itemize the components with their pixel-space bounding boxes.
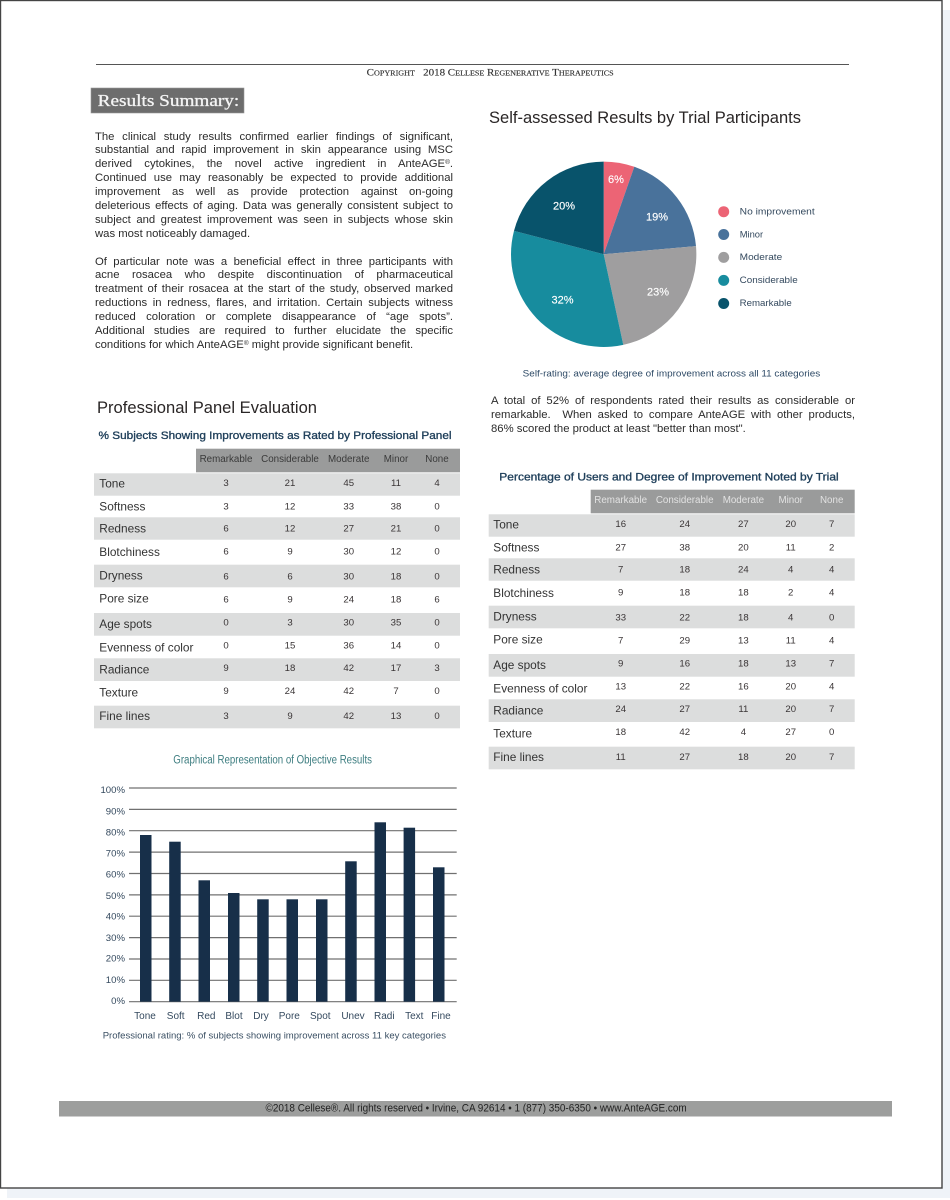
bar chart: Soft: [167, 1011, 185, 1022]
table: users by trial: 16: [615, 519, 626, 530]
table: users by trial: 4: [829, 636, 835, 647]
text block: results paragraph two: reductions in redness, flares, and irritation. Certain subjects witness: [95, 297, 453, 309]
bar chart: Pore: [279, 1011, 300, 1022]
table: professional panel: Blotchiness: [99, 545, 160, 559]
pie legend: Moderate: [740, 251, 782, 262]
table: professional panel: 18: [391, 595, 401, 606]
text block: results paragraph two: Additional studies are required to further elucidate the specific: [95, 325, 453, 337]
table: professional panel: 30: [343, 617, 354, 628]
bar chart: 20%: [106, 954, 125, 965]
table: users by trial: 11: [738, 704, 748, 715]
table: users by trial: Remarkable: [594, 495, 648, 506]
table: users by trial: 16: [679, 658, 690, 669]
table: professional panel: 17: [391, 663, 401, 674]
text block: results paragraph two: treatment of their rosacea at the start of the study, observed marked: [95, 283, 453, 295]
table: professional panel: 6: [223, 571, 229, 582]
table: users by trial: 18: [679, 588, 690, 599]
heading: professional panel: Professional Panel Evaluation: [97, 399, 317, 417]
table: professional panel: 3: [223, 478, 229, 489]
pie legend: [718, 206, 815, 309]
table: professional panel: 42: [343, 711, 354, 722]
table: users by trial: 11: [786, 636, 796, 647]
table: users by trial: 20: [785, 704, 796, 715]
table: users by trial: 27: [738, 519, 749, 530]
heading: self-assessed results: Self-assessed Results by Trial Participants: [489, 109, 801, 127]
table: professional panel: 14: [391, 640, 402, 651]
table: users by trial: 18: [615, 727, 626, 738]
table: professional panel: 3: [223, 711, 229, 722]
heading: results summary: [91, 88, 244, 113]
table: users by trial: 18: [738, 658, 749, 669]
table: users by trial: 7: [829, 752, 834, 763]
table: users by trial: Texture: [493, 727, 533, 741]
table: users by trial: 16: [738, 681, 749, 692]
table: users by trial: 2: [829, 542, 834, 553]
table: professional panel: 36: [343, 640, 354, 651]
pie caption: Self-rating: average degree of improvement across all 11 categories: [523, 368, 821, 379]
text block: results paragraph one: [95, 131, 453, 240]
bar chart: 100%: [100, 785, 125, 796]
table: users by trial: Fine lines: [493, 750, 544, 764]
table: professional panel: Considerable: [261, 454, 319, 465]
table: professional panel: 0: [434, 686, 440, 697]
table: users by trial: 24: [679, 519, 691, 530]
text block: self-assessed summary: [491, 395, 855, 435]
table: professional panel: 3: [434, 663, 440, 674]
table: users by trial: 18: [738, 752, 749, 763]
pie chart: 6%: [608, 174, 624, 186]
table: professional panel: 38: [391, 501, 401, 512]
table: users by trial: 33: [615, 612, 626, 623]
table: professional panel: 0: [434, 547, 440, 558]
table: professional panel: 4: [434, 478, 440, 489]
table: users by trial: 27: [679, 752, 690, 763]
table: users by trial: Softness: [493, 541, 539, 555]
table: professional panel: 0: [434, 617, 440, 628]
text block: self-assessed summary: A total of 52% of respondents rated their results as considerable or: [491, 395, 855, 407]
table: users by trial: Redness: [493, 563, 540, 577]
table: professional panel: Fine lines: [99, 709, 150, 723]
text block: self-assessed summary: 86% scored the product at least "better than most".: [491, 423, 746, 435]
bar chart: Red: [197, 1011, 215, 1022]
text block: results paragraph two: [95, 256, 453, 351]
table: professional panel: 12: [391, 547, 401, 558]
table: users by trial: 4: [829, 681, 835, 692]
table: users by trial: 22: [679, 681, 690, 692]
table: users by trial: 29: [679, 636, 690, 647]
table: users by trial: 20: [785, 752, 796, 763]
bar chart: 40%: [106, 912, 125, 923]
text block: results paragraph one: was most noticeably damaged.: [95, 228, 250, 240]
table: professional panel: 18: [391, 571, 401, 582]
table: professional panel: 0: [434, 640, 440, 651]
bar chart: 10%: [106, 975, 125, 986]
table: users by trial: 20: [785, 519, 796, 530]
table: professional panel: 0: [223, 617, 229, 628]
table: professional panel: [94, 449, 460, 728]
table: users by trial: Dryness: [493, 609, 537, 623]
table: professional panel: 13: [391, 711, 401, 722]
table: professional panel: 15: [285, 640, 295, 651]
table: professional panel: Texture: [99, 686, 139, 700]
table: professional panel: 30: [343, 547, 354, 558]
table: professional panel: 9: [287, 547, 293, 558]
table: users by trial: Pore size: [493, 633, 543, 647]
table: users by trial: Age spots: [493, 658, 546, 672]
table: professional panel: 6: [434, 595, 440, 606]
table: users by trial: 20: [785, 681, 796, 692]
table: users by trial: 2: [788, 588, 793, 599]
table: users by trial: 11: [616, 752, 626, 763]
table: users by trial: 27: [785, 727, 796, 738]
table: professional panel: 9: [223, 686, 229, 697]
table: users by trial: 42: [679, 727, 690, 738]
table: users by trial: 9: [618, 588, 623, 599]
table: users by trial: Moderate: [723, 495, 765, 506]
table: professional panel: Tone: [99, 476, 125, 490]
subtitle: user trial table: Percentage of Users and Degree of Improvement Noted by Trial: [499, 472, 839, 484]
table: professional panel: 7: [393, 686, 399, 697]
table: professional panel: None: [425, 454, 449, 465]
pie chart: 32%: [551, 294, 574, 306]
table: professional panel: 9: [287, 595, 293, 606]
table: users by trial: 13: [785, 658, 796, 669]
table: professional panel: 45: [343, 478, 354, 489]
table: professional panel: 12: [285, 524, 295, 535]
table: users by trial: 13: [615, 681, 626, 692]
table: professional panel: 33: [343, 501, 354, 512]
table: users by trial: 4: [829, 565, 835, 576]
bar chart: 80%: [106, 828, 125, 839]
copyright line: Copyright 2018 Cellese Regenerative Therapeutics: [367, 69, 614, 79]
bar chart: 90%: [106, 806, 125, 817]
table: users by trial: 11: [786, 542, 796, 553]
text block: results paragraph one: derived cytokines, the novel active ingredient in AnteAGE®.: [95, 158, 453, 170]
bar chart: 60%: [106, 870, 125, 881]
bar chart: [100, 785, 457, 1022]
table: users by trial: 4: [788, 612, 794, 623]
table: users by trial: 18: [738, 612, 749, 623]
table: professional panel: Remarkable: [200, 454, 253, 465]
table: professional panel: 0: [434, 711, 440, 722]
bar chart: 0%: [111, 996, 125, 1007]
table: users by trial: 0: [829, 612, 834, 623]
table: professional panel: 24: [343, 595, 355, 606]
pie legend: Minor: [740, 228, 763, 239]
table: professional panel: 3: [223, 501, 229, 512]
pie legend: Considerable: [740, 274, 798, 285]
table: professional panel: Radiance: [99, 662, 150, 676]
heading: bar chart title: Graphical Representation of Objective Results: [173, 755, 372, 767]
pie chart: 19%: [646, 212, 668, 224]
table: users by trial: 13: [738, 636, 749, 647]
table: professional panel: 6: [223, 524, 229, 535]
bar chart: 30%: [106, 933, 125, 944]
text block: results paragraph one: The clinical study results confirmed earlier findings of significant,: [95, 131, 453, 143]
table: users by trial: 4: [829, 588, 835, 599]
table: users by trial: 18: [679, 565, 690, 576]
table: professional panel: 0: [434, 524, 440, 535]
bar chart: Text: [405, 1011, 424, 1022]
text block: results paragraph one: substantial and rapid improvement in skin appearance using MSC: [95, 144, 453, 156]
table: users by trial: 7: [618, 565, 623, 576]
table: professional panel: 0: [223, 640, 229, 651]
table: users by trial: 38: [679, 542, 690, 553]
footer bar: [59, 1101, 892, 1116]
bar chart: Dry: [253, 1011, 269, 1022]
pie chart: [511, 162, 696, 347]
table: professional panel: Pore size: [99, 592, 149, 606]
bar chart: Spot: [310, 1011, 331, 1022]
table: professional panel: 18: [285, 663, 295, 674]
table: professional panel: Moderate: [328, 454, 370, 465]
table: users by trial: 24: [615, 704, 627, 715]
table: users by trial: None: [820, 495, 844, 506]
table: professional panel: 21: [391, 524, 401, 535]
table: professional panel: 6: [287, 571, 293, 582]
table: professional panel: Evenness of color: [99, 641, 193, 655]
table: professional panel: Age spots: [99, 617, 152, 631]
table: users by trial: Minor: [778, 495, 804, 506]
text block: results paragraph two: acne rosacea who despite discontinuation of pharmaceutical: [95, 269, 453, 281]
table: users by trial: Tone: [493, 517, 519, 531]
table: professional panel: 27: [343, 524, 354, 535]
table: users by trial: [489, 490, 855, 769]
table: users by trial: 4: [788, 565, 794, 576]
table: professional panel: 42: [343, 686, 354, 697]
text block: results paragraph one: subject and greatest improvement was seen in subjects whose skin: [95, 214, 453, 226]
table: users by trial: 27: [615, 542, 626, 553]
bar chart: 50%: [106, 891, 125, 902]
table: users by trial: 4: [741, 727, 747, 738]
pie legend: Remarkable: [740, 297, 792, 308]
text block: results paragraph one: Continued use may reasonably be expected to provide additional: [95, 172, 453, 184]
text block: results paragraph two: reduced coloration or complete disappearance of “age spots”.: [95, 311, 453, 323]
bar chart: Blot: [225, 1011, 243, 1022]
table: professional panel: Redness: [99, 522, 146, 536]
table: professional panel: 9: [287, 711, 293, 722]
text block: self-assessed summary: remarkable. When asked to compare AnteAGE with other products,: [491, 409, 855, 421]
table: professional panel: 6: [223, 595, 229, 606]
table: users by trial: 7: [829, 658, 834, 669]
table: users by trial: 24: [738, 565, 749, 576]
bar chart: 70%: [106, 849, 125, 860]
bar chart: Fine: [431, 1011, 451, 1022]
table: users by trial: 27: [679, 704, 690, 715]
bar chart: Tone: [134, 1011, 156, 1022]
table: users by trial: 9: [618, 658, 623, 669]
bar chart: Radi: [374, 1011, 395, 1022]
table: professional panel: 3: [287, 617, 293, 628]
table: professional panel: 30: [343, 571, 354, 582]
table: professional panel: Softness: [99, 500, 145, 514]
table: users by trial: 20: [738, 542, 749, 553]
text block: results paragraph two: conditions for which AnteAGE® might provide significant benefit.: [95, 339, 413, 351]
table: professional panel: 0: [434, 501, 440, 512]
table: professional panel: Minor: [384, 454, 409, 465]
pie legend: No improvement: [740, 206, 815, 216]
table: users by trial: Radiance: [493, 703, 544, 717]
table: professional panel: 42: [343, 663, 354, 674]
bar chart caption: Professional rating: % of subjects showing improvement across 11 key categories: [103, 1030, 446, 1041]
table: users by trial: Considerable: [656, 495, 714, 506]
bar chart: Unev: [341, 1011, 365, 1022]
table: users by trial: 22: [679, 612, 690, 623]
table: professional panel: 11: [391, 478, 401, 489]
table: professional panel: 35: [391, 617, 401, 628]
table: professional panel: 0: [434, 571, 440, 582]
table: users by trial: 7: [829, 704, 834, 715]
table: users by trial: Evenness of color: [493, 682, 587, 696]
pie chart: 20%: [553, 200, 575, 212]
table: professional panel: 21: [285, 478, 295, 489]
text block: results paragraph two: Of particular note was a beneficial effect in three participants with: [95, 256, 453, 268]
table: users by trial: 7: [829, 519, 834, 530]
table: professional panel: 9: [223, 663, 229, 674]
table: professional panel: 24: [285, 686, 296, 697]
pie chart: 23%: [647, 286, 669, 298]
footer bar: ©2018 Cellese®. All rights reserved • Irvine, CA 92614 • 1 (877) 350-6350 • www.AnteAGE.com: [266, 1102, 687, 1114]
table: users by trial: 18: [738, 588, 749, 599]
table: users by trial: 7: [618, 636, 623, 647]
table: professional panel: 6: [223, 547, 229, 558]
subtitle: professional table: % Subjects Showing Improvements as Rated by Professional Panel: [98, 430, 451, 442]
table: users by trial: 0: [829, 727, 834, 738]
table: users by trial: Blotchiness: [493, 586, 554, 600]
table: professional panel: Dryness: [99, 568, 143, 582]
heading: results summary: Results Summary:: [98, 91, 239, 110]
text block: results paragraph one: deleterious effects of aging. Data was generally consistent subject to: [95, 200, 453, 212]
table: professional panel: 12: [285, 501, 295, 512]
text block: results paragraph one: improvement as well as provide protection against on-going: [95, 186, 453, 198]
